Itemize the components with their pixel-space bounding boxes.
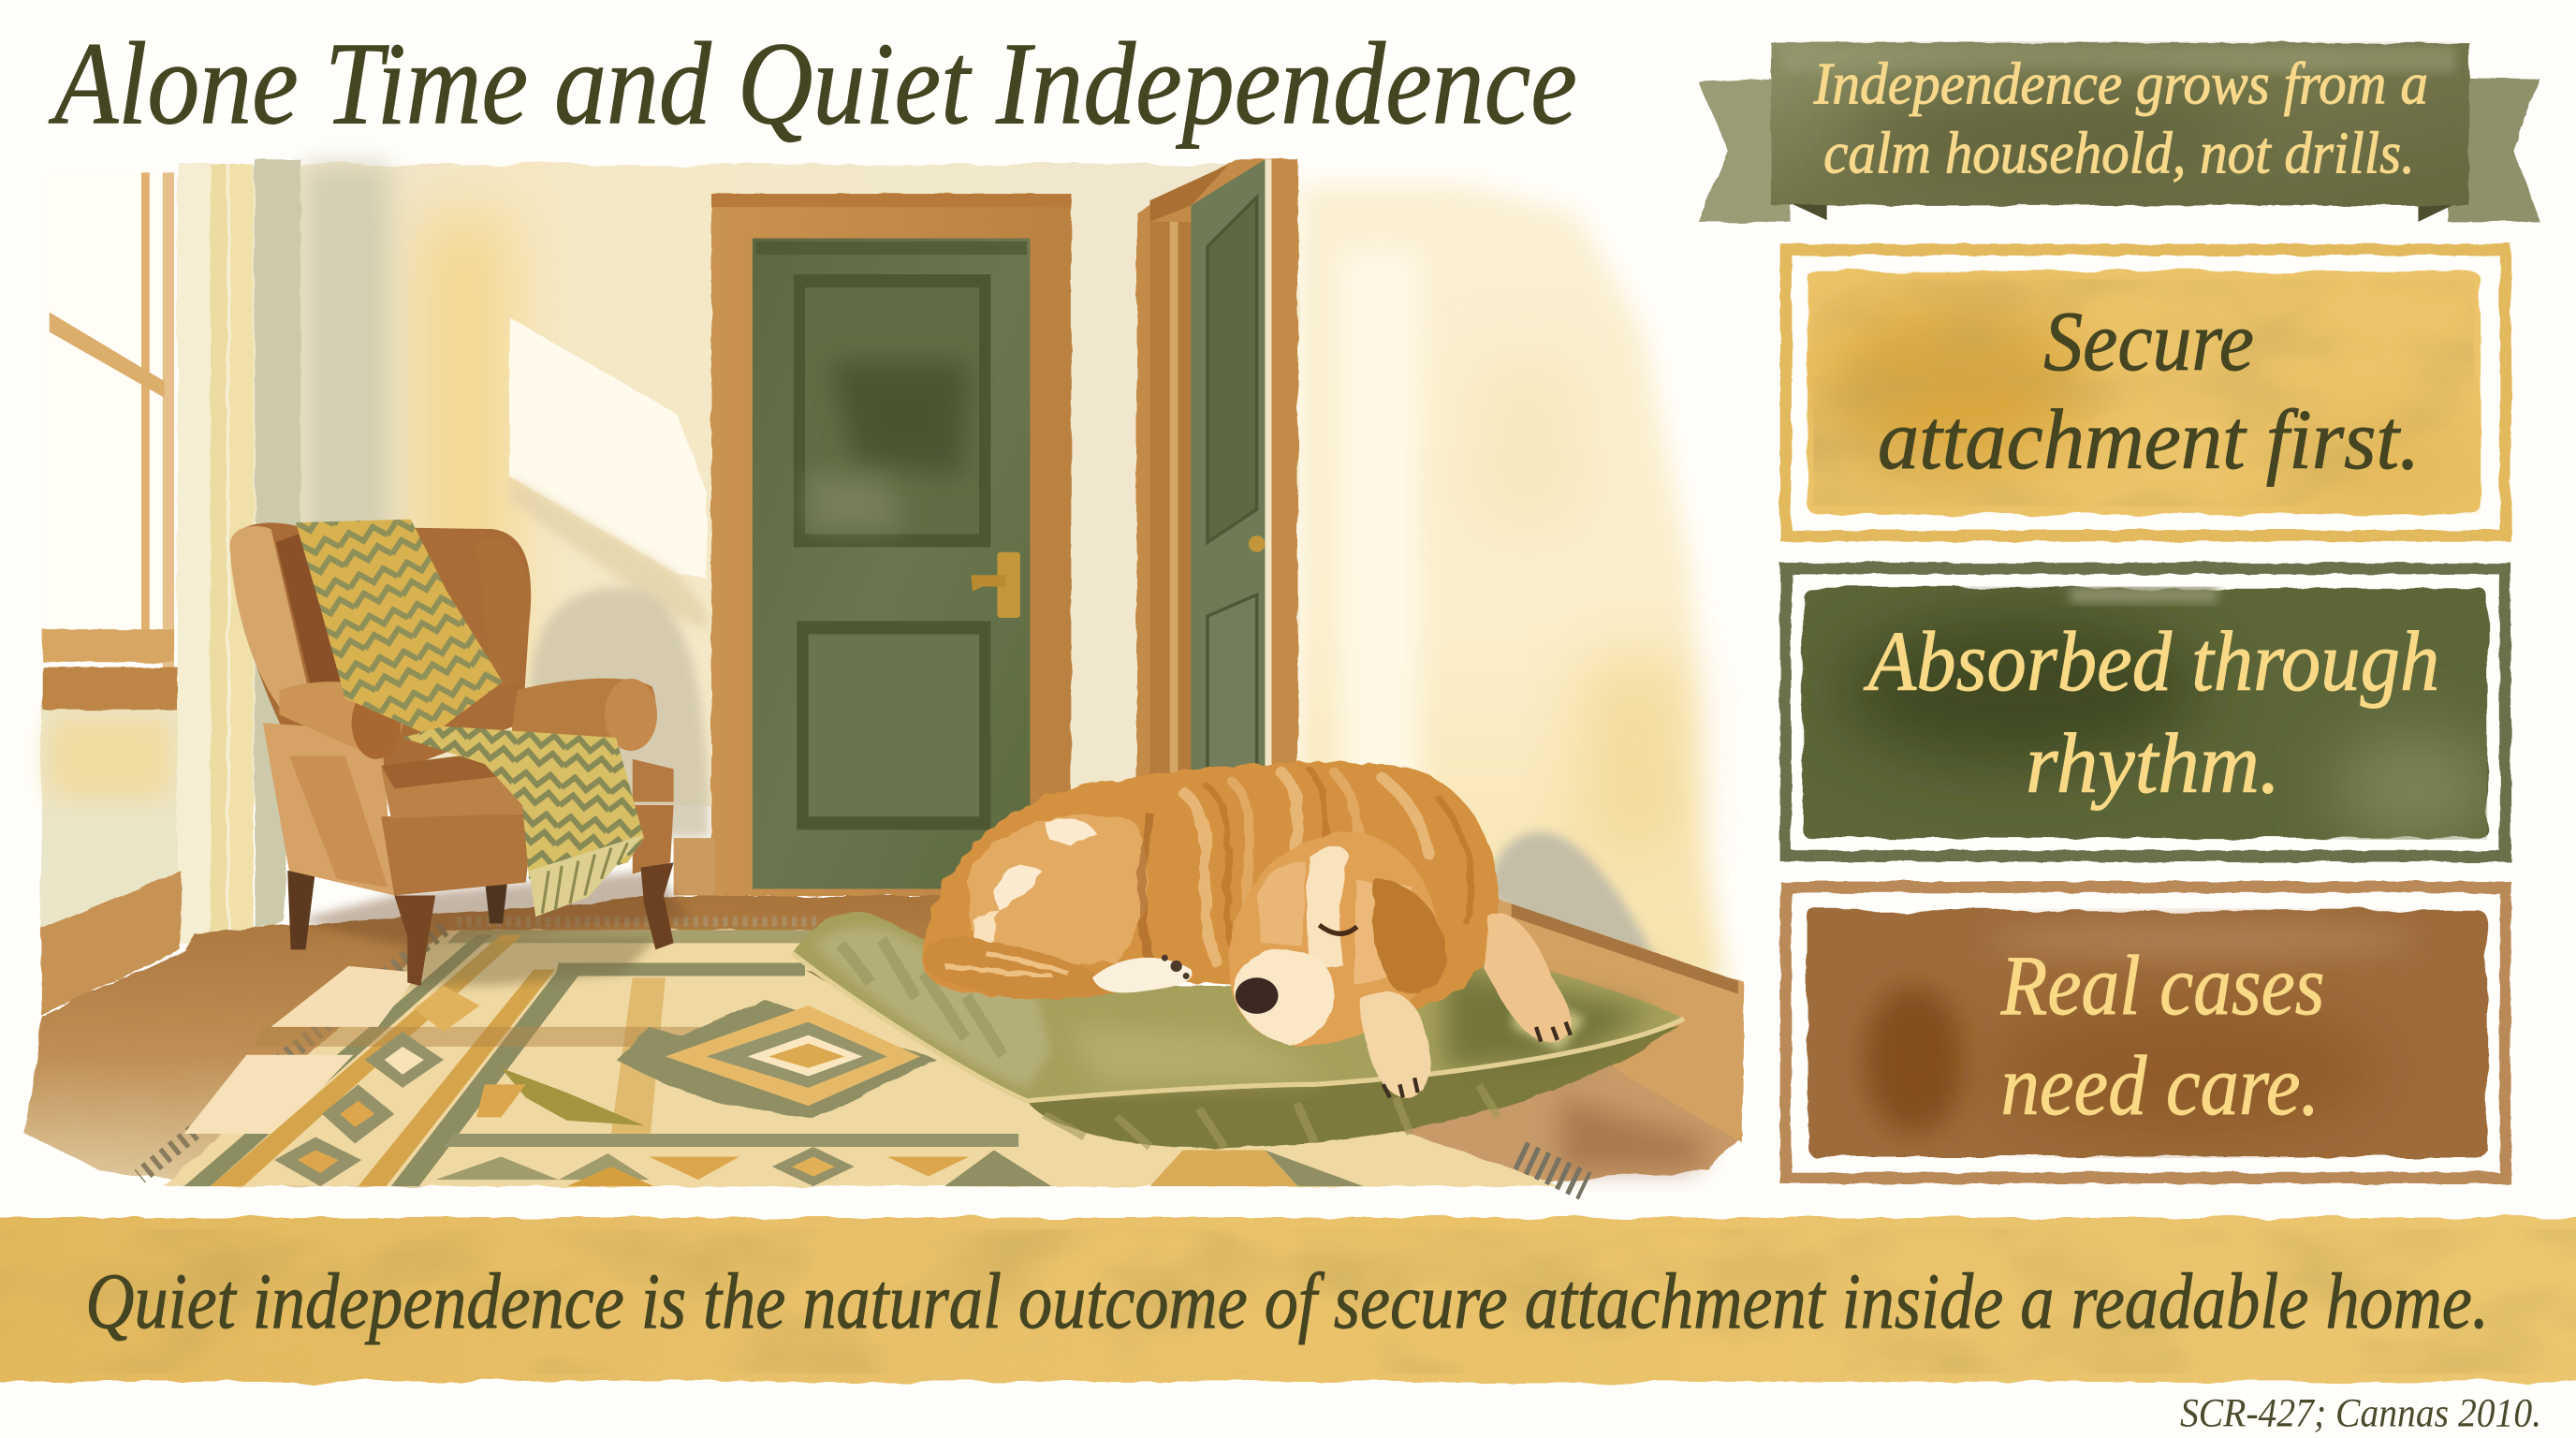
card wash	[1802, 587, 2497, 846]
card: secure attachment	[1786, 250, 2505, 536]
armchair	[229, 520, 690, 986]
card frame	[1786, 250, 2505, 536]
rug bottom motifs	[435, 1068, 1364, 1186]
wall shadow behind chair	[529, 588, 710, 838]
second open door	[1137, 159, 1298, 781]
chair arms	[279, 682, 403, 754]
card text: attachment first.	[1878, 392, 2420, 487]
lower door panel	[797, 621, 990, 829]
card text: Absorbed through	[1864, 614, 2439, 709]
source note: SCR-427; Cannas 2010.	[2180, 1390, 2541, 1435]
wall and light washes	[41, 165, 1725, 1003]
left baseboard	[41, 871, 181, 1016]
band wash	[0, 1217, 2576, 1382]
chair back legs	[287, 871, 315, 949]
card text	[1864, 614, 2439, 811]
banner right tail	[2448, 77, 2539, 222]
rug fringe	[139, 929, 444, 1177]
banner text	[1813, 51, 2428, 185]
door handle	[971, 552, 1020, 618]
dog back paw	[1092, 958, 1193, 992]
dog nose	[1236, 977, 1278, 1014]
card: real cases need care	[1786, 888, 2505, 1178]
chair front legs	[394, 895, 435, 986]
card wash	[1808, 910, 2487, 1157]
cushion piping	[792, 953, 1684, 1101]
dog muzzle	[1235, 949, 1334, 1045]
dog head	[1228, 831, 1438, 1046]
chair back and wings	[230, 522, 531, 772]
card text: Real cases	[2000, 938, 2324, 1033]
closed green door	[753, 238, 1030, 888]
dog fur highlights	[970, 769, 1471, 973]
banner	[1699, 43, 2539, 222]
banner body	[1771, 43, 2469, 205]
rug	[139, 922, 1586, 1186]
blanket fringe	[529, 835, 644, 917]
card: absorbed through rhythm	[1786, 568, 2505, 856]
throw blanket	[296, 520, 644, 917]
card wash	[1808, 271, 2481, 514]
chair shadow	[296, 871, 690, 945]
dog front paw two	[1486, 914, 1573, 1042]
card text	[1878, 294, 2420, 487]
banner text: Independence grows from a	[1813, 51, 2428, 117]
door frame	[674, 194, 1071, 895]
rug large diamond	[616, 999, 936, 1119]
banner left tail	[1699, 77, 1791, 222]
window	[43, 172, 178, 710]
card frame	[1786, 568, 2505, 856]
golden retriever	[923, 762, 1573, 1097]
floor	[24, 895, 1051, 1186]
upper door panel	[794, 274, 990, 547]
banner text: calm household, not drills.	[1823, 120, 2415, 185]
dog ear	[1373, 879, 1445, 994]
card text	[2000, 938, 2324, 1133]
right baseboard	[1486, 895, 1745, 1142]
dog body	[923, 762, 1499, 1010]
chair seat cushion	[381, 759, 526, 818]
card text: Secure	[2043, 294, 2254, 389]
card text: need care.	[2001, 1038, 2320, 1133]
card frame	[1786, 888, 2505, 1178]
wall shadow by dog	[1486, 832, 1662, 969]
title: Alone Time and Quiet Independence	[49, 19, 1577, 150]
dog cushion	[792, 912, 1684, 1148]
card text: rhythm.	[2026, 716, 2280, 811]
takeaway band	[0, 1217, 2576, 1382]
chair body	[263, 723, 394, 895]
dog tail	[925, 938, 1118, 999]
rug stripes	[446, 930, 822, 943]
illustration: dog resting in a quiet room	[24, 159, 1745, 1186]
curtain	[178, 159, 300, 945]
wall highlight: sun patch	[509, 317, 707, 579]
rug small diamonds	[274, 986, 480, 1186]
dog front paw one	[1360, 991, 1430, 1097]
dog closed eyes	[1319, 925, 1357, 933]
